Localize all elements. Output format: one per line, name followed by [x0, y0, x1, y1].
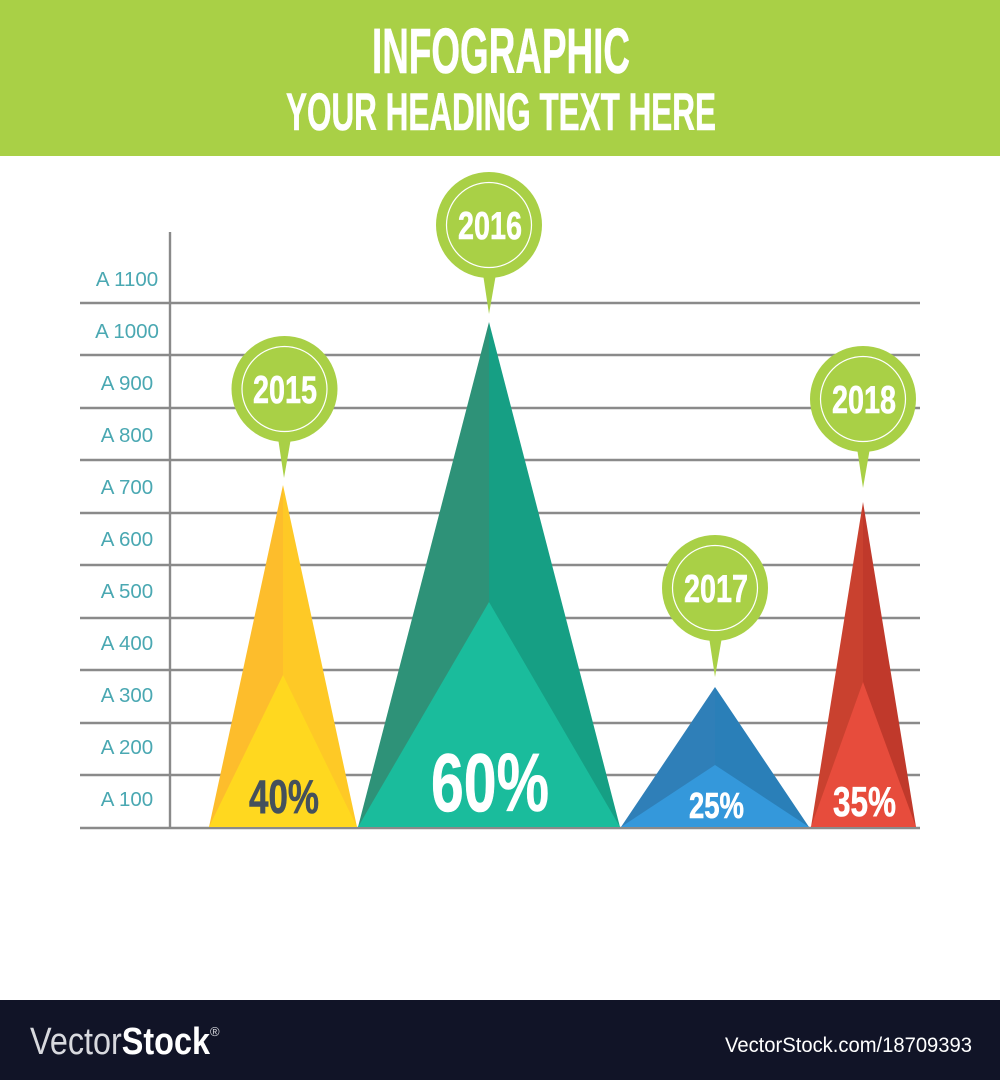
- subtitle heading: YOUR HEADING TEXT HERE: [286, 83, 716, 142]
- y axis labels: A 900: [101, 372, 153, 395]
- pin 2018: 2018: [832, 379, 896, 422]
- pin 2016: [436, 172, 542, 314]
- triangle 2017: blue 25%: [621, 687, 809, 827]
- pin 2015: 2015: [253, 369, 317, 412]
- chart grid and axis: [80, 232, 920, 828]
- triangle 2016: green 60%: [358, 322, 620, 829]
- y axis labels: A 800: [101, 424, 153, 447]
- value 25%: 25%: [689, 785, 744, 826]
- y axis labels: A 1100: [96, 268, 158, 291]
- y axis labels: A 700: [101, 476, 153, 499]
- triangle 2018: red 35%: [811, 502, 916, 827]
- y axis labels: A 1000: [95, 320, 159, 343]
- pin 2017: 2017: [684, 568, 748, 611]
- y axis labels: A 500: [101, 580, 153, 603]
- y axis labels: A 100: [101, 788, 153, 811]
- value 40%: 40%: [249, 770, 319, 823]
- y axis labels: A 600: [101, 528, 153, 551]
- pin 2017: [662, 535, 768, 677]
- value 60%: 60%: [431, 736, 549, 829]
- y axis labels: A 400: [101, 632, 153, 655]
- title: INFOGRAPHIC: [372, 15, 630, 87]
- y axis labels: A 200: [101, 736, 153, 759]
- pin 2016: 2016: [458, 205, 522, 248]
- pin 2018: [810, 346, 916, 488]
- triangle 2015: yellow 40%: [209, 485, 357, 827]
- registered mark: ®: [210, 1024, 220, 1039]
- footer url: VectorStock.com/18709393: [725, 1034, 972, 1057]
- footer logo: VectorStock: [30, 1021, 211, 1063]
- y axis labels: [95, 268, 159, 811]
- pin 2015: [232, 336, 338, 478]
- header banner: [0, 0, 1000, 156]
- value 35%: 35%: [833, 778, 896, 825]
- y axis labels: A 300: [101, 684, 153, 707]
- footer bar: [0, 1000, 1000, 1080]
